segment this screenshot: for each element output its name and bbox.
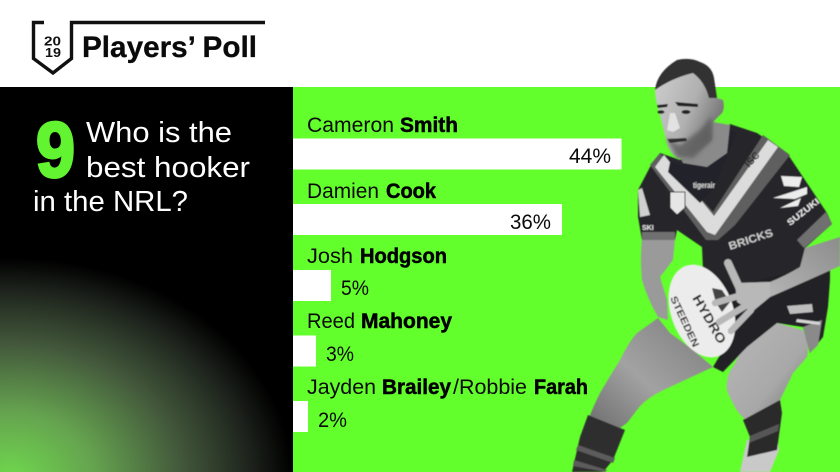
row: Jayden Brailey / Robbie Farah 2%: Jayden (307, 376, 376, 399)
jersey (638, 124, 832, 285)
row: Damien Cook 36%: Damien (307, 180, 379, 203)
row: Cameron Smith 44% (293, 114, 622, 170)
row: Cameron Smith 44%: Smith (400, 114, 458, 137)
row: Reed Mahoney 3%: 3% (326, 343, 354, 366)
question text: Who is the (86, 117, 232, 149)
row: Jayden Brailey / Robbie Farah 2%: 2% (318, 409, 347, 432)
row: Reed Mahoney 3% (293, 310, 452, 366)
sponsor text: Bricks: BRICKS (727, 227, 775, 253)
hair (655, 59, 717, 98)
left leg (588, 318, 713, 433)
row: Josh Hodgson 5% (293, 245, 447, 301)
row: Reed Mahoney 3%: Mahoney (361, 310, 452, 333)
row: Josh Hodgson 5%: Hodgson (360, 245, 447, 268)
left forearm (641, 238, 675, 320)
row: Cameron Smith 44%: Cameron (307, 114, 394, 137)
jersey white chevron (655, 140, 778, 235)
right arm (743, 237, 840, 310)
sponsor text: SKI: SKI (642, 225, 654, 232)
illustration: rugby player in greyscale (572, 59, 840, 472)
logo: 2019 shield badge: 19 (45, 45, 61, 60)
row: Josh Hodgson 5%: 5% (341, 277, 369, 300)
question text: best hooker (86, 152, 250, 184)
row: Cameron Smith 44%: 44% (569, 145, 611, 168)
eyes and brows (657, 102, 698, 114)
row: Jayden Brailey / Robbie Farah 2%: /Robbie (453, 376, 527, 399)
shorts (703, 255, 830, 372)
logo: 2019 shield badge: 20 (44, 34, 61, 48)
header: white band (0, 0, 840, 87)
head (655, 59, 724, 159)
panel: green chart background (293, 87, 840, 472)
row: Jayden Brailey / Robbie Farah 2% (293, 376, 588, 432)
stubble (666, 116, 712, 158)
club badge (670, 192, 685, 215)
left sleeve white stripe (638, 188, 650, 217)
left sock (572, 415, 625, 472)
ball logo (712, 288, 730, 312)
ball text: HYDRO: HYDRO (689, 292, 729, 346)
sponsor: S logo (773, 176, 807, 208)
neck (680, 122, 730, 167)
jersey dark collar panel (668, 128, 737, 203)
row: Damien Cook 36%: 36% (510, 211, 551, 234)
sponsor text: SUZUKI: SUZUKI (785, 196, 821, 228)
logo: 2019 shield badge (34, 22, 265, 73)
sponsor text: tigerair: tigerair (693, 181, 715, 190)
row: Josh Hodgson 5%: Josh (307, 245, 353, 268)
right boot (740, 437, 779, 472)
row: Jayden Brailey / Robbie Farah 2%: Farah (534, 376, 588, 399)
question number: 9 (36, 106, 75, 194)
rugby ball (656, 255, 748, 367)
nose (667, 113, 680, 132)
mouth (667, 138, 687, 143)
row: Damien Cook 36% (293, 180, 562, 235)
right sleeve band (797, 212, 832, 248)
jersey grey chevron (650, 135, 790, 240)
panel: black question panel (0, 87, 293, 472)
bar chart: poll results (293, 114, 622, 432)
question text (33, 117, 250, 218)
row: Jayden Brailey / Robbie Farah 2%: Brailey (382, 376, 451, 399)
question text: in the NRL? (33, 186, 188, 218)
title: Players’ Poll (82, 31, 257, 64)
left sleeve band (642, 232, 675, 240)
hand gripping ball (715, 263, 770, 331)
row: Damien Cook 36%: Cook (386, 180, 436, 203)
ball text: STEEDEN: STEEDEN (667, 295, 700, 349)
right sock (743, 400, 782, 457)
sponsor text: ISC: ISC (743, 150, 762, 170)
right leg (727, 323, 808, 423)
green corner glow (0, 250, 293, 472)
row: Reed Mahoney 3%: Reed (307, 310, 355, 333)
